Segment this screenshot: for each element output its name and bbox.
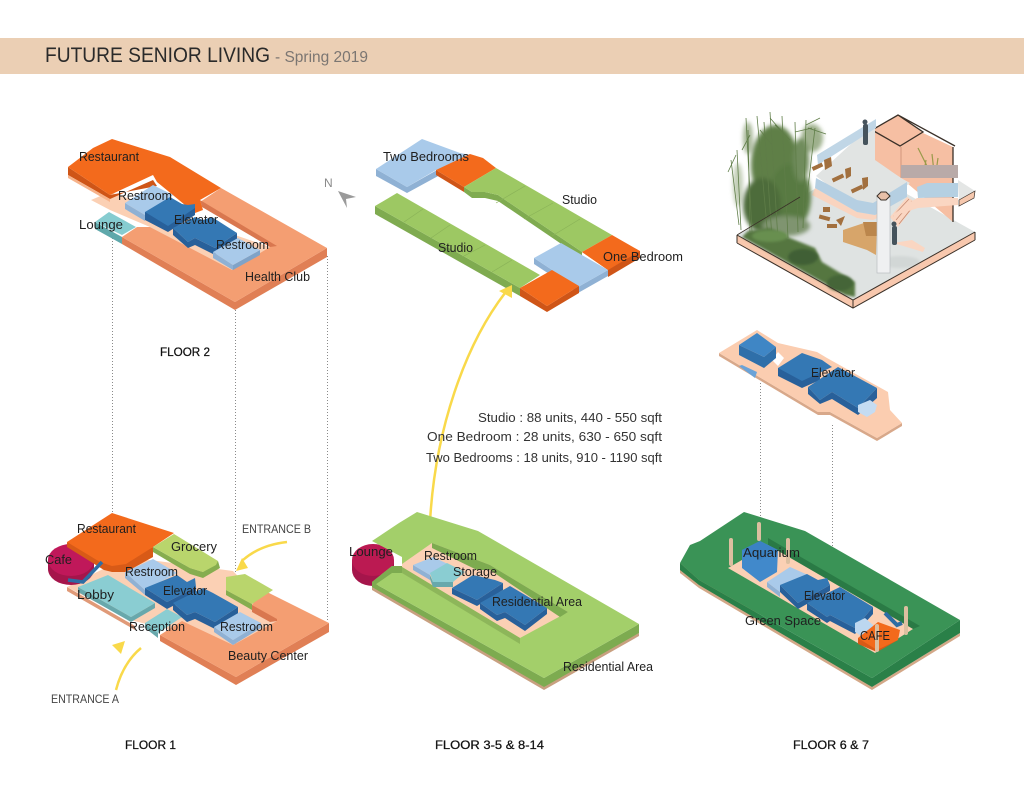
labels: floor 3-5 and 8-14: Residential Area — [492, 595, 582, 609]
lower orange unit — [520, 270, 579, 312]
terrace back glass rail — [817, 119, 876, 165]
labels: floor 1 — [45, 522, 308, 663]
labels: floor 2: Lounge — [79, 218, 123, 232]
icon: north compass: N — [324, 176, 333, 190]
labels: floor 3-5 and 8-14: Storage — [453, 565, 497, 579]
restaurant — [68, 139, 221, 213]
courtyard floor — [67, 560, 280, 645]
label: entrance A: ENTRANCE A — [51, 692, 119, 706]
labels: floor 6-7: Aquarium — [743, 546, 800, 560]
cafe — [48, 544, 94, 585]
beauty center salmon wing — [160, 590, 329, 685]
labels: floor 1: Restroom — [125, 565, 178, 579]
aquarium — [742, 541, 778, 582]
illustration: axonometric cafe view — [728, 112, 975, 308]
text block: unit statistics: Studio : 88 units, 440 - 550 sqft — [478, 411, 663, 425]
dotted projection lines — [112, 238, 832, 652]
labels: upper units: Studio — [562, 193, 597, 207]
slab front edge — [737, 232, 975, 308]
stair ramp — [885, 613, 902, 625]
restroom south — [214, 612, 261, 645]
labels: floor 3-5 and 8-14: Lounge — [349, 545, 393, 559]
diagonal slab edge through grove — [737, 197, 800, 235]
plan: floor 3-5 and 8-14 upper units — [375, 139, 640, 312]
labels: floor 6-7 — [743, 546, 890, 643]
title banner: FUTURE SENIOR LIVING — [45, 44, 270, 67]
title banner: - Spring 2019 — [275, 49, 368, 66]
text block: unit statistics: One Bedroom : 28 units, 630 - 650 sqft — [427, 430, 663, 444]
labels: floor 1: Restaurant — [77, 522, 136, 536]
two bedrooms unit — [376, 139, 476, 193]
upper orange unit — [436, 154, 496, 192]
labels: floor 2: Health Club — [245, 270, 310, 284]
white column — [877, 192, 890, 273]
label: upper slab elevator: Elevator — [811, 366, 855, 380]
one bedroom unit — [582, 235, 640, 277]
bamboo grove — [728, 112, 826, 240]
mauve rail — [901, 165, 958, 178]
plan: floor 6-7 — [680, 512, 960, 690]
people — [862, 120, 897, 245]
plan: floor 1 — [48, 513, 329, 685]
studio row east — [464, 168, 612, 258]
labels: floor 1: Restroom — [220, 620, 273, 634]
terrace front glass rail — [815, 178, 907, 215]
arrow: entrance B — [236, 542, 287, 571]
labels: upper units: One Bedroom — [603, 250, 683, 264]
east grocery block — [226, 574, 273, 610]
courtyard — [728, 545, 913, 653]
arrow: entrance A — [112, 641, 141, 690]
inner ring wall — [432, 543, 568, 617]
lounge drum — [352, 544, 394, 586]
title banner — [0, 38, 1024, 74]
labels: floor 1: Beauty Center — [228, 649, 308, 663]
restroom north — [125, 559, 177, 595]
columns — [729, 522, 908, 652]
labels: floor 2 — [79, 150, 310, 284]
elevator core upper — [778, 353, 877, 415]
stair ramp — [68, 562, 102, 582]
courtyard floor — [91, 192, 270, 271]
restroom — [413, 557, 450, 580]
text block: unit statistics: Two Bedrooms : 18 units, 910 - 1190 sqft — [426, 451, 663, 465]
labels: floor 2: Restaurant — [79, 150, 140, 164]
restaurant — [67, 513, 174, 572]
green ring — [680, 512, 960, 690]
labels: floor 3-5 and 8-14 — [349, 545, 653, 674]
pink bridge — [890, 198, 958, 217]
lobby — [78, 575, 155, 622]
plan: floor 2 — [68, 139, 327, 310]
blue unit — [534, 243, 608, 293]
elevator core — [145, 197, 237, 255]
stair flight — [890, 197, 917, 227]
lounge — [95, 212, 136, 244]
labels: floor 1: Lobby — [77, 588, 115, 602]
elevator core — [145, 575, 238, 629]
green residential ring — [372, 512, 639, 690]
text block: unit statistics — [426, 411, 663, 465]
heading: floor 3-5 and 8-14: FLOOR 3-5 & 8-14 — [435, 738, 544, 752]
planting shrubs — [742, 228, 855, 297]
labels: floor 1: Reception — [129, 620, 185, 634]
labels: floor 3-5 and 8-14: Restroom — [424, 549, 477, 563]
small box — [855, 618, 873, 637]
heading: floor 1: FLOOR 1 — [125, 738, 176, 752]
labels: floor 6-7: CAFE — [860, 629, 890, 643]
health club salmon wing — [122, 188, 327, 310]
small restroom box — [858, 400, 877, 417]
blue side rail — [917, 183, 958, 198]
icon: north compass — [324, 176, 356, 208]
terrace tables and chairs — [812, 157, 868, 228]
plan: floor 3-5 and 8-14 — [352, 512, 639, 690]
elevator core — [780, 574, 873, 634]
opening — [772, 352, 784, 366]
labels: floor 3-5 and 8-14: Residential Area — [563, 660, 653, 674]
cafe volume — [858, 622, 900, 652]
landing — [893, 240, 925, 252]
right balcony — [958, 180, 975, 206]
restroom light volume — [767, 567, 808, 597]
labels: floor 1: Cafe — [45, 553, 72, 567]
heading: floor 2: FLOOR 2 — [160, 345, 210, 359]
terrace floor — [816, 122, 910, 212]
salmon tower walls — [872, 115, 955, 222]
arrow: floor plan to unit layout — [430, 285, 512, 522]
restroom south — [213, 238, 260, 270]
labels: floor 6-7: Elevator — [804, 589, 845, 603]
labels: upper units — [383, 150, 683, 264]
labels: floor 1: Elevator — [163, 584, 207, 598]
labels: floor 2: Elevator — [174, 213, 218, 227]
terrace fascia — [812, 188, 886, 220]
reception — [145, 609, 182, 638]
labels: upper units: Two Bedrooms — [383, 150, 469, 164]
restroom north — [125, 185, 173, 221]
plan: floor 6-7 upper slab — [719, 330, 902, 441]
labels: upper units: Studio — [438, 241, 473, 255]
courtyard — [402, 543, 568, 638]
label: entrance B: ENTRANCE B — [242, 522, 311, 536]
peach slab — [719, 330, 902, 441]
heading: floor 6 and 7: FLOOR 6 & 7 — [793, 738, 869, 752]
labels: floor 1: Grocery — [171, 540, 218, 554]
planter inside tower — [918, 148, 938, 172]
aquarium volume — [739, 333, 776, 378]
labels: floor 6-7: Green Space — [745, 614, 821, 628]
labels: floor 2: Restroom — [118, 189, 172, 203]
grocery — [153, 534, 220, 578]
storage — [430, 563, 465, 587]
studio row west — [375, 193, 540, 296]
residential core — [452, 575, 547, 631]
ground slab — [737, 165, 975, 308]
labels: floor 2: Restroom — [216, 238, 269, 252]
inner ring wall — [768, 538, 920, 629]
wood counter — [843, 222, 877, 255]
